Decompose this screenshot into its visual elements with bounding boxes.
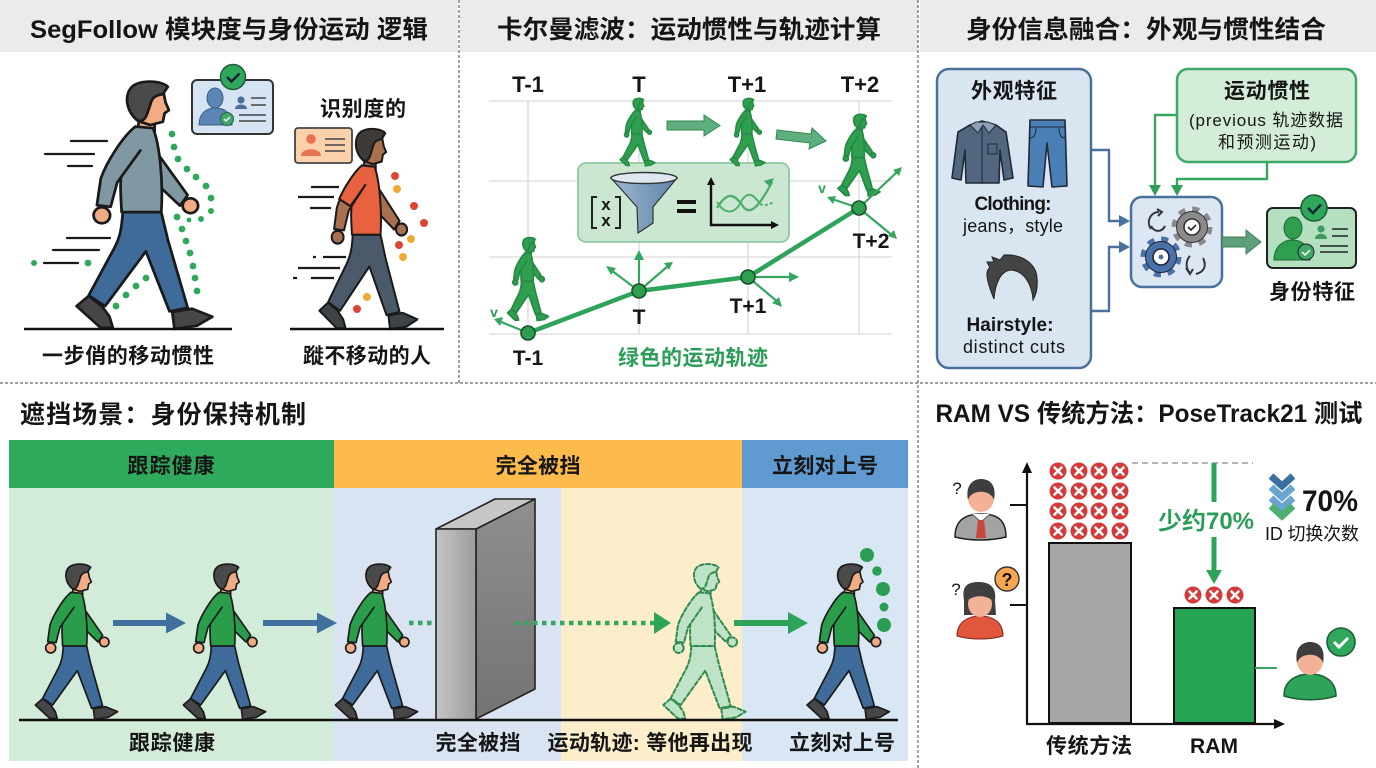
- panel: occlusion scenario: [9, 401, 908, 761]
- caption: occluded: 完全被挡: [436, 731, 520, 755]
- icon: grey gear: [1174, 210, 1210, 244]
- icon: shirt: [952, 121, 1013, 183]
- velocity arrowheads: [494, 167, 902, 326]
- text: prediction: 和预测运动): [1218, 133, 1316, 152]
- trajectory: [528, 208, 859, 333]
- time labels top: T+1: [728, 72, 766, 97]
- ground lines: [24, 328, 444, 330]
- person: man green: [1284, 628, 1355, 700]
- axes: [1010, 462, 1285, 729]
- icon: ID card verified: [192, 64, 273, 134]
- caption: re-match: 立刻对上号: [789, 731, 895, 755]
- caption: trajectory waiting: 运动轨迹: 等他再出现: [548, 732, 752, 755]
- walker T+2: [838, 114, 880, 196]
- header: re-match: 立刻对上号: [772, 454, 878, 478]
- text: hairstyle: Hairstyle:: [966, 315, 1054, 336]
- ghost person: [663, 564, 746, 719]
- walker T: [508, 98, 880, 321]
- title: Kalman: 卡尔曼滤波：运动惯性与轨迹计算: [497, 16, 881, 44]
- short sleeve: [339, 165, 365, 206]
- caption: tracking: 跟踪健康: [129, 731, 215, 755]
- icon: hair: [987, 255, 1037, 300]
- label: RAM: RAM: [1190, 735, 1238, 758]
- header bars: [9, 440, 908, 488]
- title: RAM: RAM VS 传统方法：PoseTrack21 测试: [936, 399, 1362, 428]
- question mark: ?: [951, 580, 961, 599]
- reduction arrow: [1212, 463, 1216, 573]
- nodes: [521, 201, 866, 340]
- time labels lower: T+2: [853, 230, 889, 253]
- blue arrow 2: [263, 612, 337, 634]
- icon: cycle arrows: [1149, 209, 1205, 274]
- person: man grey: [952, 479, 1006, 540]
- label: 识别度的: 识别度的: [320, 98, 406, 121]
- icon: green ID card: [1267, 195, 1356, 268]
- label: left walker caption: 一步俏的移动惯性: [42, 345, 214, 368]
- matrix bracket: x: [601, 195, 611, 214]
- label: reduction: 少约70%: [1158, 508, 1254, 535]
- heading: appearance: 外观特征: [971, 80, 1057, 103]
- time labels top: [512, 72, 879, 97]
- matrix bracket: x: [601, 211, 611, 230]
- box: motion inertia: [1177, 69, 1356, 162]
- people tracked: [35, 564, 889, 719]
- time labels top: T+2: [841, 72, 879, 97]
- text: jeans style: jeans，style: [962, 216, 1063, 236]
- funnel: [611, 172, 677, 233]
- connector green: [1155, 115, 1267, 187]
- icon: chevrons: [1271, 476, 1293, 516]
- green arrow: [734, 612, 808, 634]
- wall: [436, 499, 535, 720]
- icon: jeans: [1028, 120, 1067, 187]
- time labels lower: [513, 230, 889, 370]
- person re-appeared: [807, 564, 889, 719]
- title: fusion: 身份信息融合：外观与惯性结合: [966, 16, 1326, 44]
- time labels lower: T: [633, 306, 646, 329]
- title: occlusion: 遮挡场景：身份保持机制: [20, 401, 306, 429]
- velocity labels: v: [818, 180, 826, 196]
- time labels top: T: [632, 72, 646, 97]
- text: clothing: Clothing:: [974, 194, 1052, 215]
- header: tracking: 跟踪健康: [128, 454, 214, 478]
- bar: traditional: [1049, 543, 1131, 723]
- text: distinct cuts: distinct cuts: [963, 337, 1065, 357]
- filter box: [578, 163, 789, 242]
- arrow: to identity: [1222, 230, 1261, 254]
- blue arrow 1: [113, 612, 186, 634]
- velocity labels: v: [490, 304, 498, 320]
- speed lines right: [293, 187, 346, 278]
- matrix bracket: [592, 195, 620, 230]
- errors traditional: [1050, 462, 1128, 540]
- person: confident walker: [77, 82, 212, 329]
- green motion dots: [31, 131, 214, 309]
- bar: RAM: [1174, 608, 1255, 723]
- header: occluded: 完全被挡: [496, 454, 580, 478]
- heading: inertia: 运动惯性: [1224, 80, 1310, 103]
- text: previous: (previous 轨迹数据: [1189, 111, 1343, 130]
- person: dark walker: [319, 129, 417, 329]
- red and orange dots: [353, 172, 428, 313]
- caption: trajectory: 绿色的运动轨迹: [618, 347, 768, 370]
- icon: orange ID card: [295, 128, 352, 163]
- time labels lower: T-1: [513, 347, 543, 370]
- time labels lower: T+1: [730, 295, 767, 318]
- block arrow 1: [667, 115, 720, 136]
- re-id dots: [860, 548, 891, 632]
- walker T-1: [508, 238, 549, 321]
- connector blue: [1091, 150, 1122, 311]
- stat: 70 percent: 70%: [1302, 485, 1358, 518]
- velocity arrows: [499, 172, 897, 333]
- box: appearance: [937, 69, 1091, 368]
- person: woman red: [951, 567, 1019, 639]
- person 2: [183, 564, 266, 719]
- small chart: [707, 177, 779, 229]
- dotted trajectory: [409, 621, 654, 625]
- person 3: [335, 564, 418, 719]
- question mark: ?: [952, 479, 962, 498]
- badge: question: ?: [1002, 570, 1012, 590]
- stat label: ID 切换次数: [1265, 524, 1359, 544]
- errors RAM: [1184, 586, 1244, 604]
- speed lines left: [44, 141, 110, 263]
- label: identity: 身份特征: [1269, 281, 1355, 304]
- velocity labels: [490, 180, 826, 320]
- box: fusion gears: [1131, 197, 1222, 287]
- title: SegFollow: SegFollow 模块度与身份运动 逻辑: [30, 16, 428, 44]
- background zones: [9, 488, 908, 761]
- walker T+1: [730, 98, 765, 166]
- panel: identity fusion: [920, 0, 1376, 368]
- label: right walker caption: 蹝不移动的人: [303, 345, 431, 368]
- panel: RAM comparison: [936, 399, 1362, 758]
- badge: check: [1327, 628, 1355, 656]
- icon: blue gear: [1144, 240, 1178, 274]
- panel: Kalman filter: [460, 0, 918, 370]
- label: traditional: 传统方法: [1046, 734, 1132, 758]
- block arrow 2: [776, 128, 826, 149]
- panel: SegFollow module: [0, 0, 458, 368]
- time labels top: T-1: [512, 72, 544, 97]
